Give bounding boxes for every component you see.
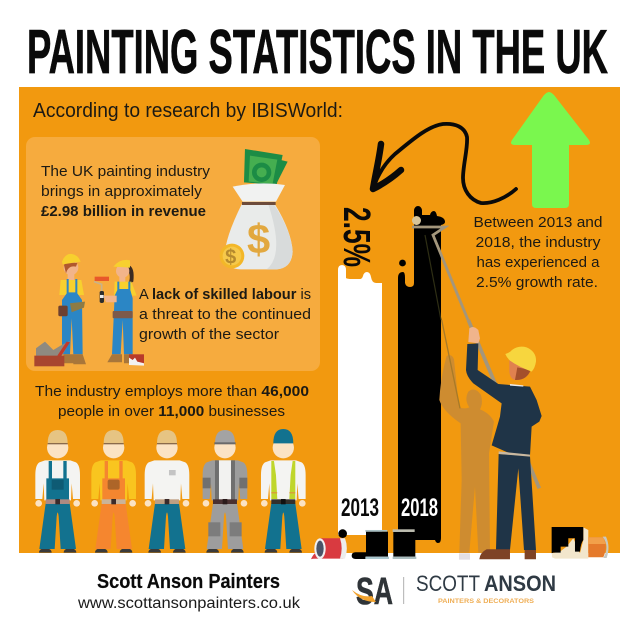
icon: money bag: $ (225, 246, 236, 268)
collar (510, 384, 523, 387)
worker: hi-vis vest (261, 429, 306, 553)
logo tagline: PAINTERS & DECORATORS (438, 598, 535, 605)
worker: white shirt (145, 430, 189, 553)
text: revenue: brings in approximately (41, 184, 203, 200)
icon: green up arrow (511, 92, 590, 208)
footer: website: www.scottansonpainters.co.uk (77, 595, 300, 612)
logo: Scott Anson: ANSON (484, 571, 556, 596)
text: growth rate: has experienced a (476, 255, 600, 271)
footer: company name: Scott Anson Painters (97, 571, 280, 593)
text: employment (35, 384, 309, 420)
roller pole (468, 320, 539, 488)
paint cans (311, 527, 608, 559)
text: skilled labour: growth of the sector (139, 327, 279, 343)
logo wordmark: SCOTT (416, 571, 480, 596)
text: growth rate: 2.5% growth rate. (476, 275, 598, 291)
painter shadow (439, 355, 494, 553)
drip blobs (338, 529, 366, 559)
panel: orange background (19, 87, 620, 553)
man (58, 254, 86, 364)
jacket (466, 343, 542, 456)
bar chart: paint bars 2013 vs 2018 (335, 206, 445, 543)
worker: orange overalls (91, 430, 136, 553)
text: skilled labour: a threat to the continued (139, 307, 311, 323)
value label: 2.5%: 2.5% (335, 207, 377, 267)
roller head (412, 216, 468, 320)
text: growth rate: Between 2013 and (474, 215, 602, 231)
panel: revenue and labour card (26, 137, 320, 371)
paint drip dot (399, 260, 406, 266)
logo mark (352, 571, 393, 613)
can: black paint (365, 530, 389, 559)
can: orange (588, 537, 608, 558)
row of five workers (35, 429, 306, 553)
logo: Scott Anson (352, 571, 556, 613)
head (509, 359, 531, 380)
trousers (496, 454, 536, 550)
arrow: curved black arrow to bar chart (373, 124, 516, 203)
toolbox (34, 341, 70, 366)
worker: blue overalls (35, 430, 80, 553)
heading: research source: According to research by IBISWorld: (33, 99, 343, 122)
bar: 2013 white paint (338, 265, 382, 535)
logo mark: SA (356, 571, 393, 613)
shoes (479, 549, 536, 559)
bar: 2018 black paint (398, 206, 445, 543)
woman (103, 260, 144, 366)
icon: money bag: $ (247, 216, 270, 263)
text: employment: people in over 11,000 businesses (58, 404, 285, 420)
year label: 2018: 2018 (401, 494, 438, 522)
hard hat (505, 347, 536, 372)
text: revenue: £2.98 billion in revenue (41, 204, 206, 220)
text: employment: The industry employs more than 46,000 (35, 384, 309, 400)
text: revenue: The UK painting industry (41, 164, 211, 180)
can: grey paint (393, 529, 416, 559)
can: red spilled (311, 538, 347, 559)
illustration: two painters with toolbox (34, 254, 144, 366)
text: revenue (41, 164, 211, 220)
paint roller (94, 277, 109, 303)
text: skilled labour (139, 287, 311, 343)
icon: money bag (220, 149, 293, 269)
text: growth rate: 2018, the industry (476, 235, 601, 251)
shadow pole (442, 320, 460, 408)
year label: 2013: 2013 (341, 494, 379, 522)
text: growth rate (474, 215, 602, 291)
hand (468, 327, 480, 343)
can: cream spilled (552, 527, 588, 559)
worker: grey uniform (203, 430, 247, 553)
text: skilled labour: A lack of skilled labour is (139, 287, 311, 303)
illustration: painter with roller pole (439, 320, 542, 560)
